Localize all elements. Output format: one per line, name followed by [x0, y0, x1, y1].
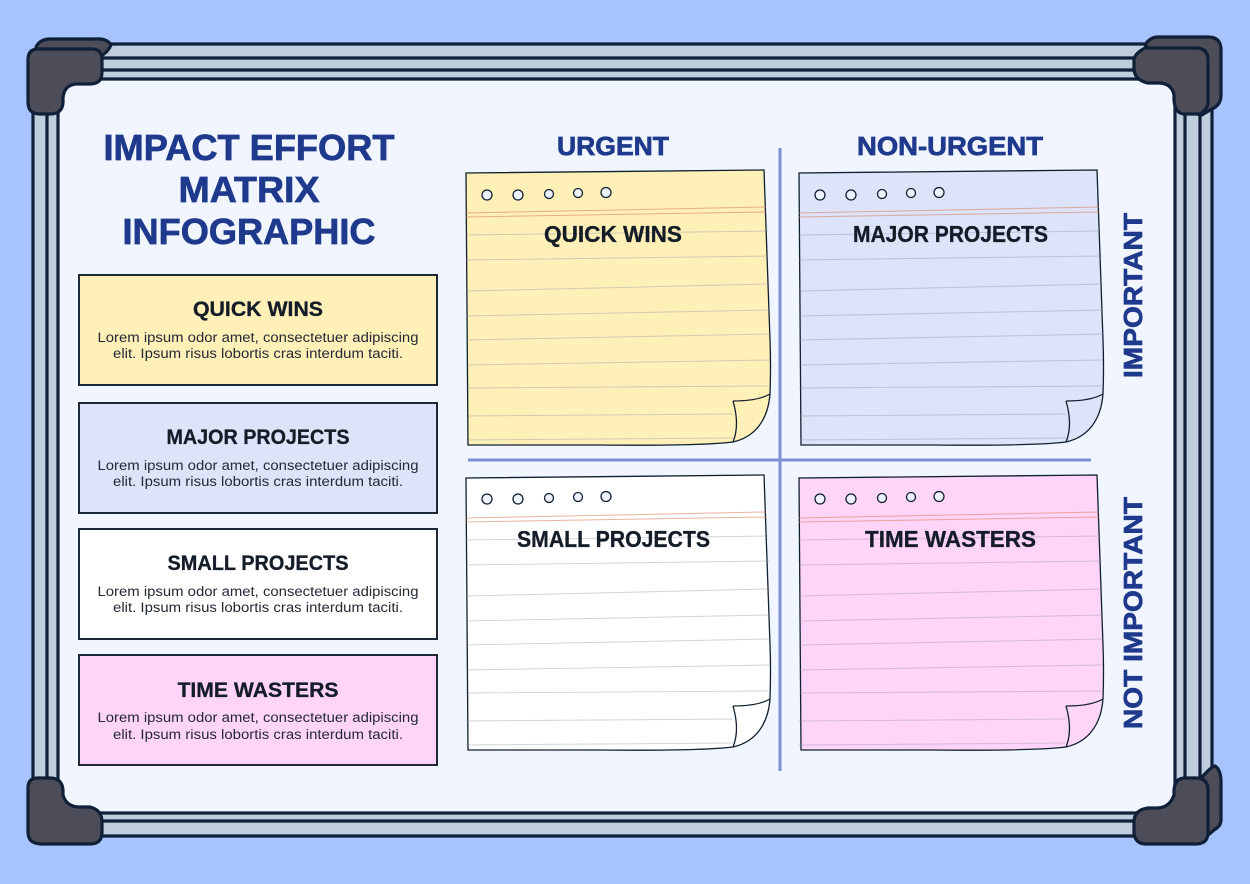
legend card: quick wins — [79, 275, 437, 385]
corner: top right — [1134, 37, 1221, 116]
title: MATRIX — [178, 169, 320, 210]
legend card: time wasters: Lorem ipsum odor amet, consectetuer adipiscing — [98, 710, 418, 725]
note: time wasters: TIME WASTERS — [865, 526, 1036, 552]
title — [104, 127, 394, 252]
note: major projects: MAJOR PROJECTS — [853, 221, 1048, 247]
note: small projects — [466, 475, 770, 750]
legend card: quick wins: Lorem ipsum odor amet, consectetuer adipiscing — [98, 330, 418, 345]
title: INFOGRAPHIC — [122, 211, 376, 252]
note: major projects — [799, 170, 1104, 445]
note: small projects: SMALL PROJECTS — [517, 526, 710, 552]
legend card: time wasters: TIME WASTERS — [178, 679, 338, 702]
legend card: major projects: Lorem ipsum odor amet, consectetuer adipiscing — [98, 458, 418, 473]
legend card: major projects — [79, 403, 437, 513]
matrix axes — [468, 148, 1091, 771]
note: quick wins — [466, 170, 770, 445]
corner: bottom left — [28, 778, 102, 844]
column heading: non-urgent: NON-URGENT — [857, 131, 1043, 161]
row heading: important: IMPORTANT — [1118, 213, 1148, 378]
legend card: small projects: SMALL PROJECTS — [168, 552, 348, 575]
legend card: major projects: elit. Ipsum risus lobortis cras interdum taciti. — [113, 474, 403, 489]
title: IMPACT EFFORT — [104, 127, 394, 168]
legend card: time wasters: elit. Ipsum risus lobortis cras interdum taciti. — [113, 727, 403, 742]
legend card: quick wins: QUICK WINS — [193, 298, 323, 321]
legend card: time wasters — [79, 655, 437, 765]
note: time wasters — [799, 475, 1104, 750]
note: quick wins: QUICK WINS — [544, 221, 682, 247]
column heading: urgent: URGENT — [557, 131, 669, 161]
row heading: not important: NOT IMPORTANT — [1118, 497, 1148, 729]
corner: top left — [28, 39, 111, 114]
legend card: small projects: elit. Ipsum risus lobortis cras interdum taciti. — [113, 600, 403, 615]
legend card: major projects: MAJOR PROJECTS — [166, 426, 350, 449]
corner: bottom right — [1134, 766, 1221, 844]
legend card: small projects: Lorem ipsum odor amet, consectetuer adipiscing — [98, 584, 418, 599]
legend card: small projects — [79, 529, 437, 639]
legend card: quick wins: elit. Ipsum risus lobortis cras interdum taciti. — [113, 346, 403, 361]
